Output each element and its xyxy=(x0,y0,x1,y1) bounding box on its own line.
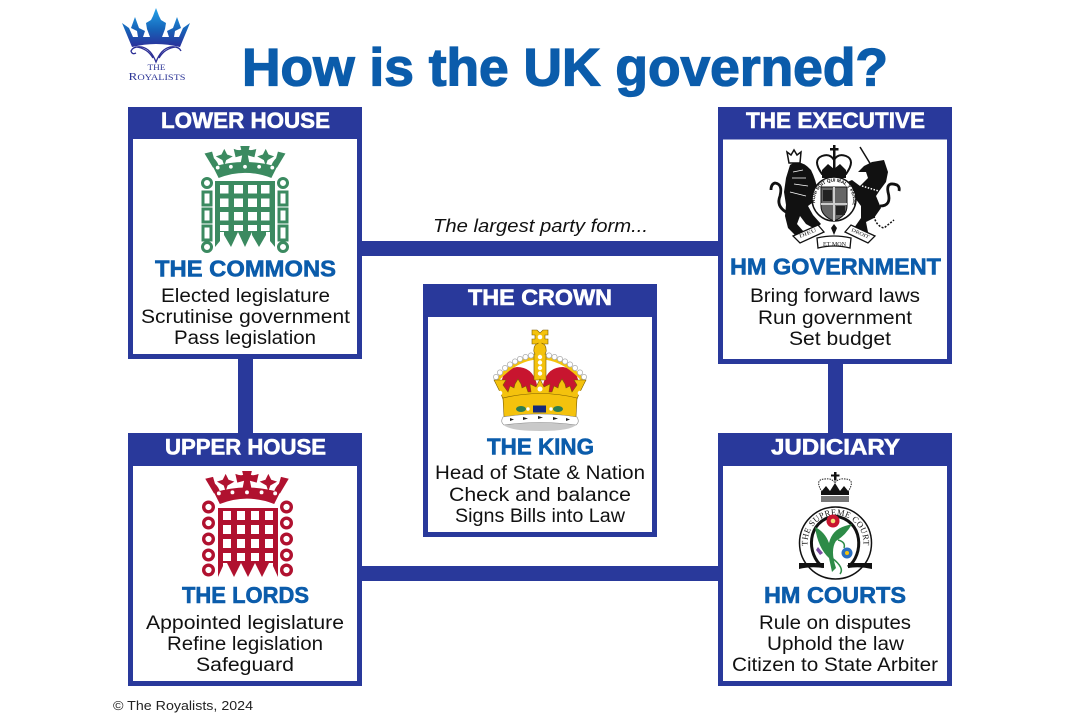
icon: Supreme Court emblem xyxy=(798,472,872,580)
panel: lower house: Pass legislation xyxy=(174,328,316,349)
panel: the executive: Set budget xyxy=(789,329,892,350)
panel: the crown xyxy=(423,284,657,537)
title: How is the UK governed? xyxy=(242,38,888,98)
icon: Tudor crown xyxy=(493,330,587,431)
panel: judiciary xyxy=(718,433,952,686)
panel: judiciary: HM COURTS xyxy=(764,582,906,608)
connector: Commons to Lords xyxy=(238,357,253,435)
icon: Supreme Court emblem: THE SUPREME COURT xyxy=(802,509,870,546)
icon: royal coat of arms: DROIT xyxy=(850,228,870,241)
panel: the executive: HM GOVERNMENT xyxy=(730,254,941,280)
logo: The Royalists: ROYALISTS xyxy=(128,71,186,83)
connector: Government to Courts xyxy=(828,362,843,435)
icon: green portcullis xyxy=(202,146,288,252)
panel: judiciary: Rule on disputes xyxy=(759,613,911,634)
panel: the crown: Signs Bills into Law xyxy=(455,506,625,527)
panel: judiciary: Uphold the law xyxy=(767,634,904,655)
panel: judiciary: JUDICIARY xyxy=(771,434,900,460)
panel: lower house: Scrutinise government xyxy=(141,307,351,328)
panel: lower house: THE COMMONS xyxy=(155,256,336,282)
panel: the executive: Run government xyxy=(758,308,913,329)
panel: the crown: THE KING xyxy=(487,434,594,460)
panel: the crown: THE CROWN xyxy=(468,285,612,310)
icon: royal coat of arms xyxy=(770,145,901,249)
panel: upper house: THE LORDS xyxy=(182,582,309,608)
copyright: © The Royalists, 2024 xyxy=(113,698,253,713)
panel: upper house: UPPER HOUSE xyxy=(165,434,326,460)
connector: Commons to Government xyxy=(360,241,720,256)
panel: the executive: THE EXECUTIVE xyxy=(746,108,925,133)
icon: royal coat of arms: DIEU xyxy=(799,228,818,240)
icon: royal coat of arms: ET MON xyxy=(823,241,846,248)
logo: The Royalists xyxy=(122,8,190,83)
panel: upper house: Safeguard xyxy=(196,655,294,676)
panel: lower house xyxy=(128,107,362,359)
panel: the executive xyxy=(718,107,952,364)
panel: the executive: Bring forward laws xyxy=(750,286,920,307)
connector label: The largest party form... xyxy=(433,215,648,236)
panel: upper house: Refine legislation xyxy=(167,634,323,655)
panel: judiciary: Citizen to State Arbiter xyxy=(732,655,939,676)
panel: the crown: Head of State & Nation xyxy=(435,463,645,484)
panel: upper house xyxy=(128,433,362,686)
icon: royal coat of arms: HONI SOIT QUI MAL Y PENSE xyxy=(812,178,856,206)
panel: lower house: LOWER HOUSE xyxy=(161,108,330,133)
panel: upper house: Appointed legislature xyxy=(146,613,344,634)
panel: the crown: Check and balance xyxy=(449,485,631,506)
panel: lower house: Elected legislature xyxy=(161,286,330,307)
icon: red portcullis xyxy=(204,471,291,577)
logo: The Royalists: THE xyxy=(148,63,166,72)
connector: Lords to Courts xyxy=(360,566,720,581)
